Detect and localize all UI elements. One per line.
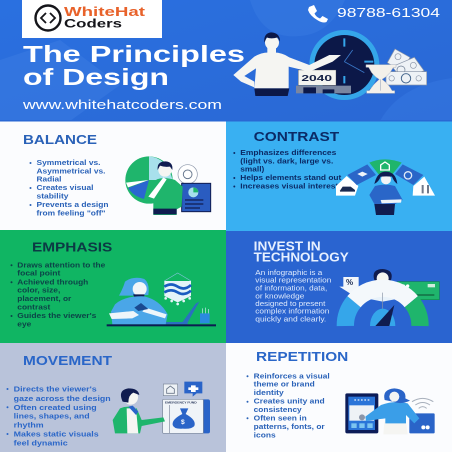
panel: contrast: [226, 121, 452, 231]
emphasis bullets: Achieved through: [17, 279, 88, 286]
panel: invest in technology: [226, 231, 452, 342]
movement bullets: Makes static visuals: [14, 432, 99, 438]
movement bullets: gaze across the design: [14, 396, 111, 403]
repetition heading: REPETITION: [256, 350, 348, 364]
invest heading: INVEST IN: [254, 240, 321, 254]
panel divider lines: [0, 120, 452, 343]
movement bullets: Often created using: [14, 405, 97, 412]
illustration: person with clock, calendar, hourglass and money: [233, 30, 427, 100]
title: [23, 41, 245, 90]
repetition bullets: icons: [254, 432, 276, 439]
balance bullets: Radial: [36, 177, 62, 184]
repetition bullets: identity: [254, 390, 284, 397]
invest heading: TECHNOLOGY: [254, 250, 349, 264]
contrast bullets: Helps elements stand out: [240, 175, 342, 182]
contrast bullets: Emphasizes differences: [240, 150, 336, 157]
panel: header: [0, 0, 452, 121]
illustration: person under icon arc: [336, 159, 435, 215]
invest paragraph: of information, data,: [255, 285, 327, 292]
repetition bullets: Often seen in: [254, 415, 307, 422]
emphasis bullets: contrast: [17, 304, 51, 311]
contrast bullets: [233, 150, 342, 191]
balance heading: BALANCE: [23, 133, 97, 147]
panel: emphasis: [0, 230, 226, 342]
panel: movement: [0, 342, 226, 452]
invest heading: [254, 240, 349, 264]
movement bullets: feel dynamic: [14, 440, 68, 448]
illustration: person pointing at emergency fund board: $: [181, 419, 185, 426]
emphasis bullets: color, size,: [17, 288, 60, 295]
emphasis bullets: eye: [17, 322, 31, 329]
website url: www.whitehatcoders.com: [22, 97, 222, 112]
repetition bullets: Reinforces a visual: [254, 373, 330, 380]
illustration: person at desk with banner: [107, 273, 216, 326]
balance bullets: [30, 160, 108, 218]
emphasis bullets: [10, 262, 105, 329]
balance bullets: Asymmetrical vs.: [36, 168, 106, 175]
contrast heading: CONTRAST: [254, 130, 340, 144]
panel: balance: [0, 121, 226, 230]
repetition bullets: Creates unity and: [254, 399, 325, 406]
contrast bullets: (light vs. dark, large vs.: [240, 158, 333, 165]
movement heading: MOVEMENT: [23, 354, 112, 368]
repetition bullets: consistency: [254, 407, 302, 414]
invest paragraph: complex information: [255, 309, 329, 316]
invest paragraph: or knowledge: [255, 293, 304, 300]
invest paragraph: designed to present: [255, 301, 325, 308]
title: of Design: [23, 64, 169, 90]
movement bullets: rhythm: [14, 422, 44, 429]
illustration: person with pie chart: [125, 156, 211, 215]
balance bullets: Symmetrical vs.: [36, 160, 101, 167]
emphasis heading: EMPHASIS: [32, 241, 112, 255]
invest paragraph: quickly and clearly.: [255, 316, 326, 323]
emphasis bullets: Guides the viewer's: [17, 313, 96, 320]
repetition bullets: theme or brand: [254, 382, 315, 389]
balance bullets: Creates visual: [36, 185, 94, 192]
title: The Principles: [23, 41, 245, 67]
emphasis bullets: focal point: [17, 271, 61, 278]
balance bullets: from feeling "off": [36, 211, 106, 218]
logo: Coders: [64, 16, 122, 30]
repetition bullets: patterns, fonts, or: [254, 424, 325, 431]
movement bullets: [6, 386, 111, 448]
illustration: person behind gauge with card and percent: [339, 269, 439, 326]
illustration: person behind gauge with card and percent: %: [346, 278, 353, 287]
balance bullets: stability: [36, 194, 69, 201]
emphasis bullets: placement, or: [17, 296, 72, 303]
invest paragraph: visual representation: [255, 278, 331, 285]
contrast bullets: Increases visual interest: [240, 184, 339, 191]
phone contact: [308, 5, 440, 22]
invest paragraph: An infographic is a: [255, 270, 322, 277]
illustration: person pointing at emergency fund board: EMERGENCY FUND: [165, 401, 197, 405]
illustration: person pointing at emergency fund board: [113, 382, 210, 433]
illustration: person with clock, calendar, hourglass and money: 2040: [301, 73, 332, 83]
illustration: person with tablet and card: [345, 388, 435, 434]
phone contact: 98788-61304: [337, 5, 440, 20]
contrast bullets: small): [240, 167, 264, 174]
panel: repetition: [226, 342, 452, 452]
logo: [22, 0, 162, 38]
emphasis bullets: Draws attention to the: [17, 262, 105, 269]
repetition bullets: [246, 373, 330, 439]
logo: WhiteHat: [64, 4, 146, 19]
balance bullets: Prevents a design: [36, 202, 108, 209]
invest paragraph: [255, 270, 331, 323]
movement bullets: lines, shapes, and: [14, 413, 90, 420]
movement bullets: Directs the viewer's: [14, 386, 97, 394]
